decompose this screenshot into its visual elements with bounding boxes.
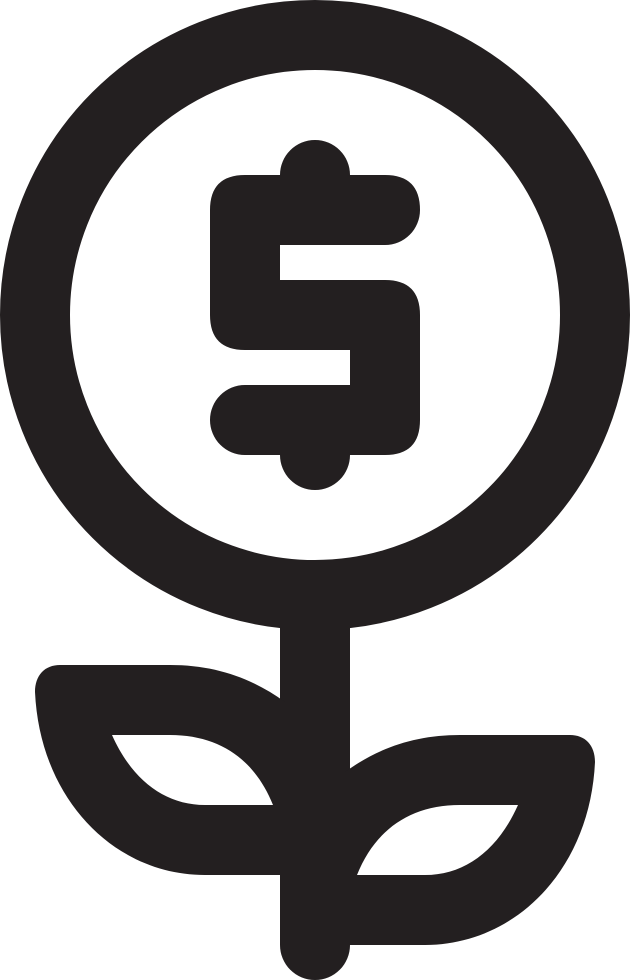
icon: stem	[280, 610, 350, 980]
icon: left leaf	[35, 665, 285, 875]
icon: coin ring	[35, 35, 595, 595]
icon: right leaf	[345, 735, 595, 945]
icon: dollar sign	[210, 140, 420, 490]
